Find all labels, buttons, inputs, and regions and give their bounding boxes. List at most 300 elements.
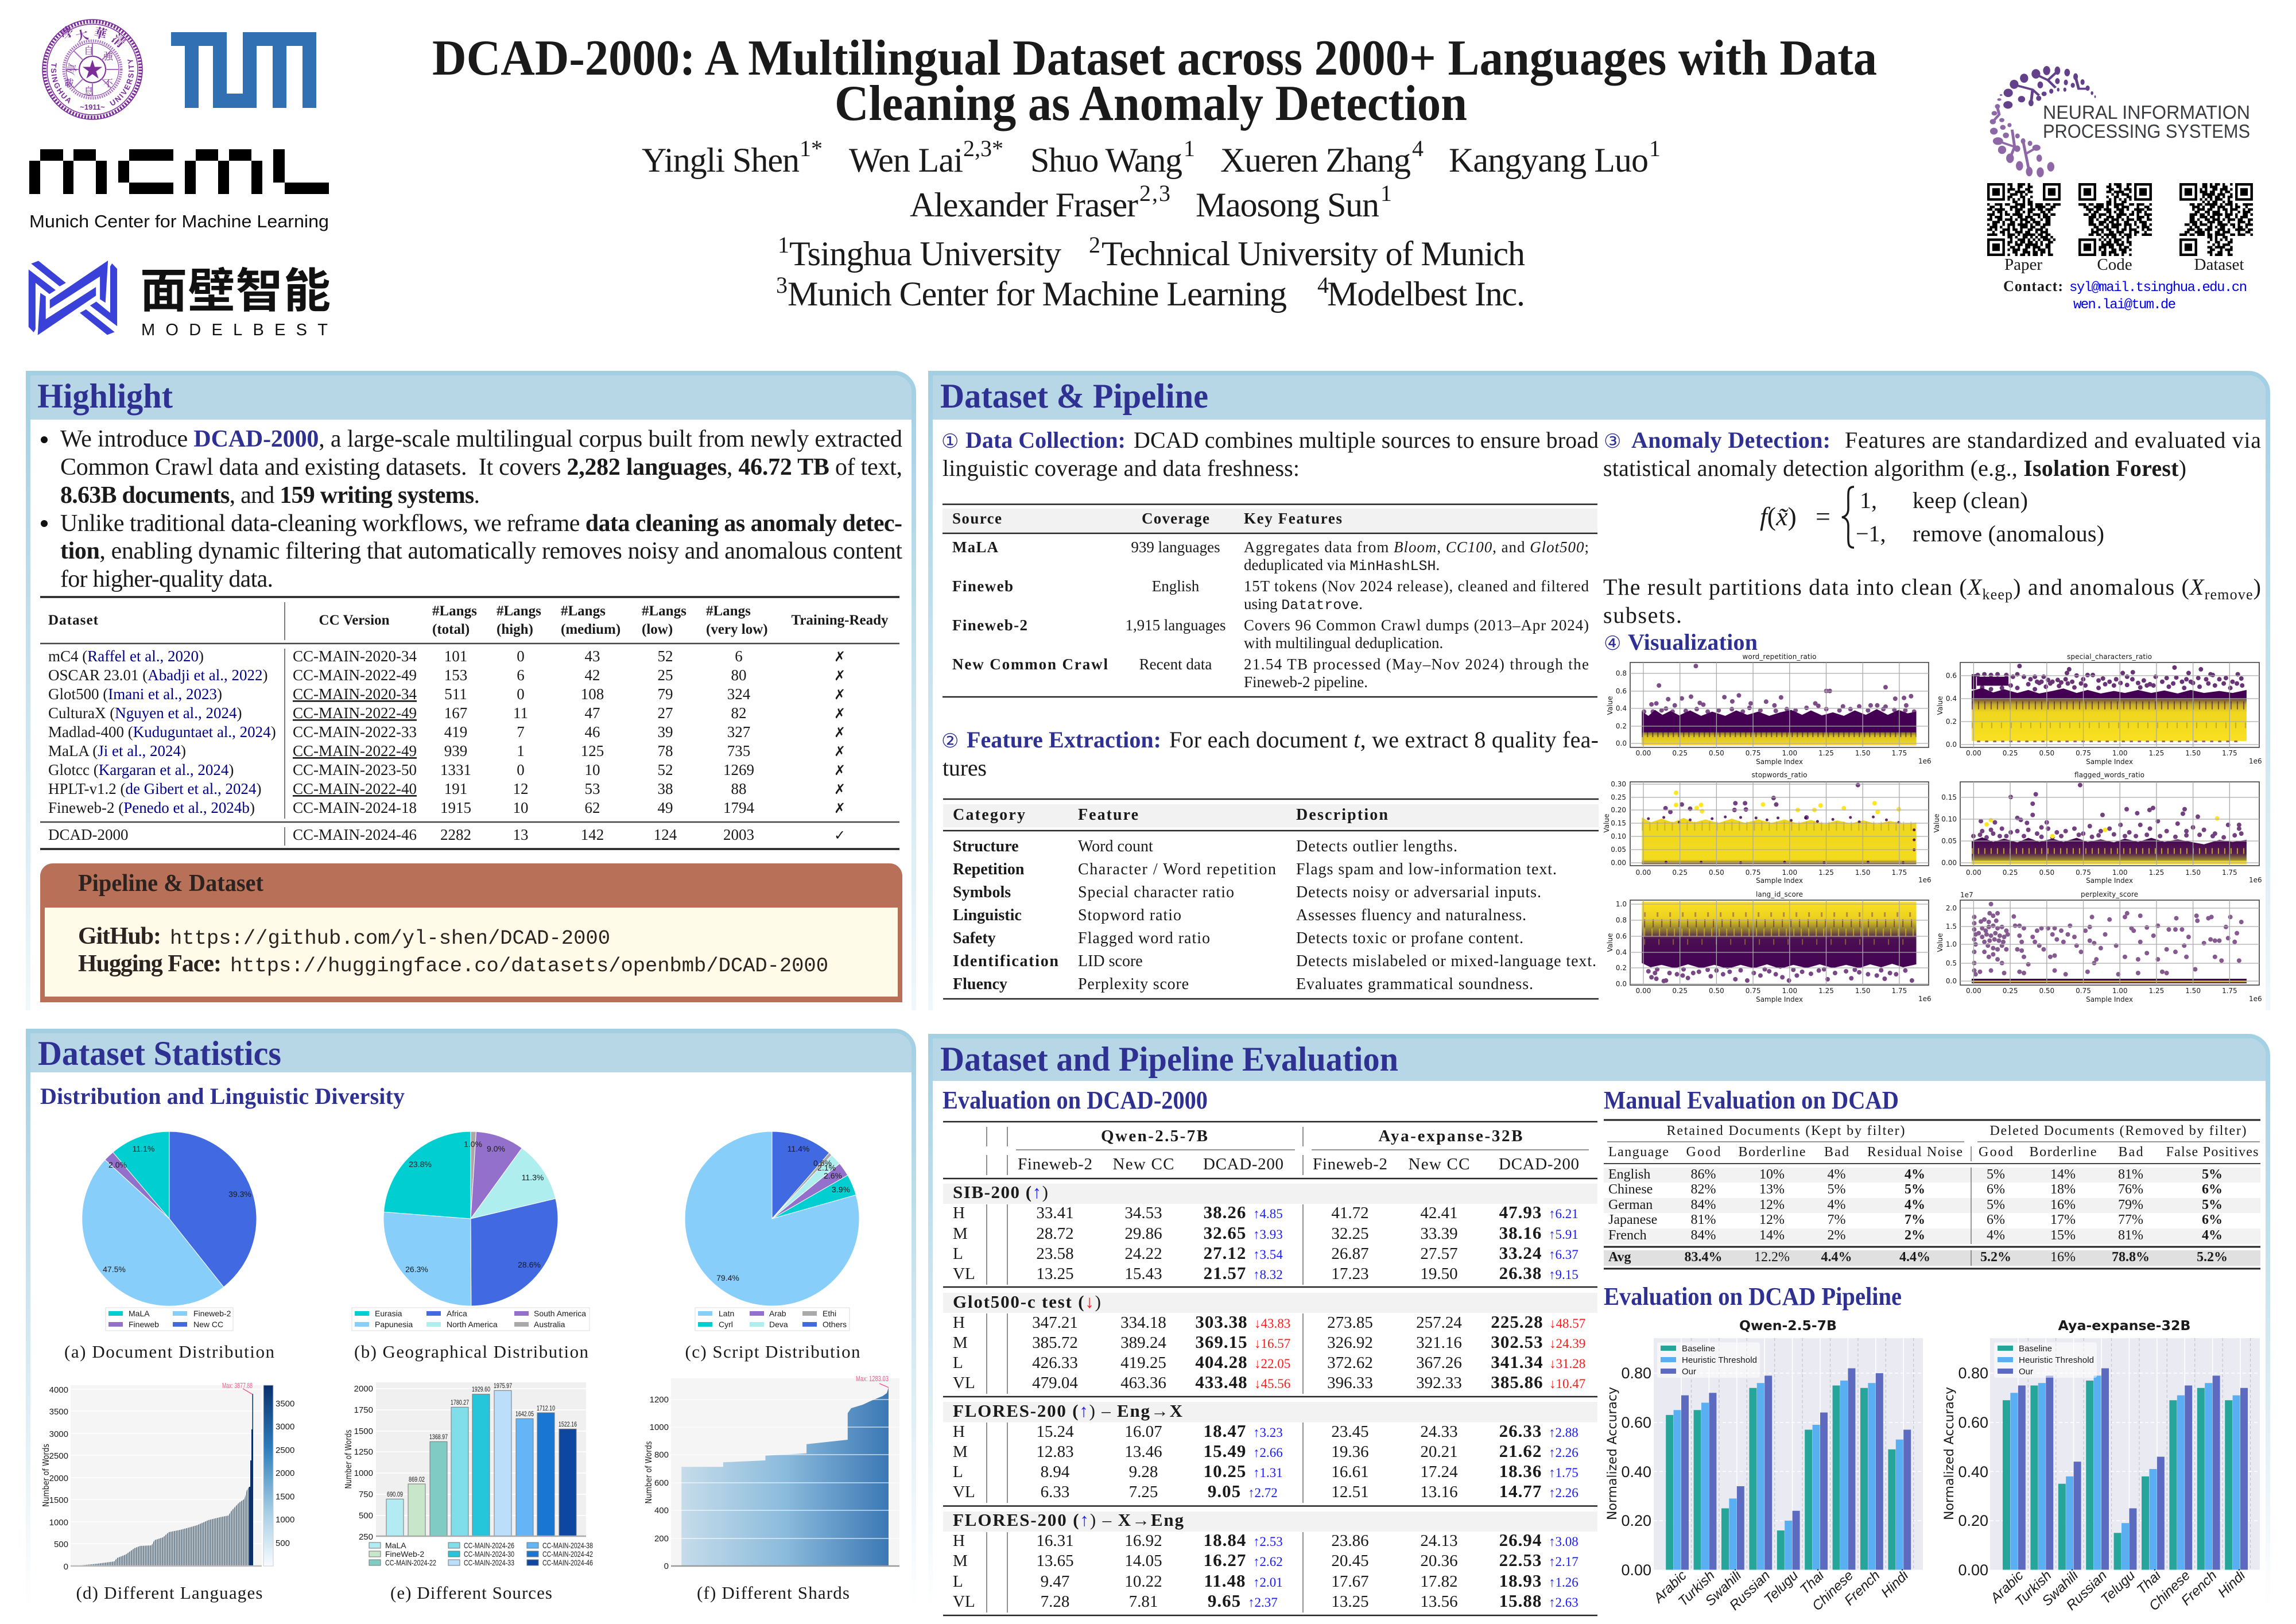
group: Glot500-c test: ↓10.47 bbox=[1549, 1377, 1585, 1391]
table rows: 167 bbox=[444, 704, 467, 722]
group: FLORES-200 Eng to X: 8.94 bbox=[1041, 1463, 1070, 1481]
group: FLORES-200 Eng to X: ↑2.88 bbox=[1549, 1425, 1578, 1440]
table: evaluation on DCAD-2000 bbox=[943, 1122, 1597, 1615]
group: FLORES-200 Eng to X: ↑2.66 bbox=[1253, 1445, 1283, 1460]
bar chart: different sources bbox=[343, 1382, 593, 1603]
group: FLORES-200 X to Eng: 20.36 bbox=[1420, 1552, 1458, 1570]
table rows: 84% bbox=[1691, 1228, 1716, 1243]
group: FLORES-200 Eng to X: 9.28 bbox=[1129, 1463, 1158, 1481]
table rows: MaLA (Ji et al., 2024) bbox=[48, 742, 186, 759]
text block: data collection: linguistic coverage and data freshness: bbox=[943, 455, 1300, 481]
chart: lang_id_score scatter: 0.4 bbox=[1616, 948, 1627, 956]
table column headers: Fineweb-2 bbox=[1313, 1155, 1387, 1173]
y axis ticks: 1750 bbox=[354, 1405, 373, 1415]
affiliations: 2 bbox=[1089, 232, 1100, 258]
table rows: OSCAR 23.01 (Abadji et al., 2022) bbox=[48, 666, 267, 684]
group: FLORES-200 X to Eng: 16.31 bbox=[1036, 1532, 1074, 1550]
table rows: CC-MAIN-2024-18 bbox=[293, 799, 417, 816]
group: Glot500-c test: 372.62 bbox=[1327, 1354, 1373, 1372]
chart: special_characters_ratio scatter bbox=[1936, 653, 2262, 766]
group: Glot500-c test: 326.92 bbox=[1327, 1334, 1373, 1352]
contact: Contact: bbox=[2003, 278, 2063, 294]
group: SIB-200: 27.57 bbox=[1420, 1245, 1458, 1263]
table column headers: Fineweb-2 bbox=[1018, 1155, 1092, 1173]
chart: perplexity_score scatter: 0.0 bbox=[1946, 977, 1957, 985]
bar chart: Aya-expanse-32B accuracy bbox=[1942, 1319, 2260, 1614]
chart: special_characters_ratio scatter: 1.75 bbox=[2222, 749, 2237, 757]
group: SIB-200: 13.25 bbox=[1036, 1265, 1074, 1283]
group: FLORES-200 Eng to X: 16.61 bbox=[1331, 1463, 1369, 1481]
legend: CC-MAIN-2024-26 bbox=[464, 1541, 514, 1550]
y axis ticks: 1250 bbox=[354, 1447, 373, 1457]
language labels: Telugu bbox=[1761, 1568, 1801, 1607]
group: SIB-200: ↑8.32 bbox=[1253, 1268, 1283, 1282]
table header: (very low) bbox=[706, 622, 768, 637]
highlights text block: tion, enabling dynamic filtering that automatically removes noisy and anomalous content bbox=[60, 538, 902, 564]
QR code: code bbox=[2078, 183, 2152, 256]
table rows: 14% bbox=[1759, 1228, 1785, 1243]
group: FLORES-200 X to Eng bbox=[953, 1510, 1578, 1611]
group: SIB-200: 21.57 bbox=[1204, 1263, 1246, 1283]
group: Glot500-c test: ↓45.56 bbox=[1254, 1377, 1290, 1391]
group: FLORES-200 X to Eng: 26.94 bbox=[1499, 1530, 1542, 1550]
visualization heading: ④ bbox=[1604, 632, 1621, 655]
table rows: 80 bbox=[731, 666, 746, 684]
chart: perplexity_score scatter: 2.0 bbox=[1946, 904, 1957, 912]
bar chart: Qwen-2.5-7B accuracy bbox=[1605, 1319, 1923, 1614]
legend: CC-MAIN-2024-22 bbox=[385, 1558, 436, 1567]
text block: feature extraction bbox=[941, 727, 1599, 781]
table: data sources: using Datatrove. bbox=[1244, 595, 1363, 614]
axis label: Normalized Accuracy bbox=[1605, 1387, 1620, 1520]
table rows: 939 bbox=[444, 742, 467, 759]
group: Glot500-c test: 396.33 bbox=[1327, 1374, 1373, 1392]
chart: lang_id_score scatter: 0.6 bbox=[1616, 932, 1627, 940]
table rows: Madlad-400 (Kuduguntaet al., 2024) bbox=[48, 723, 276, 741]
logo: Tsinghua University seal: 載 bbox=[64, 75, 74, 90]
group: SIB-200: ↑3.54 bbox=[1253, 1247, 1283, 1262]
table rows: 39 bbox=[658, 723, 673, 741]
y axis ticks bbox=[1958, 1365, 1988, 1579]
y axis ticks: 1500 bbox=[354, 1427, 373, 1436]
table rows: 10 bbox=[584, 761, 600, 778]
group: FLORES-200 Eng to X: L bbox=[953, 1463, 963, 1481]
chart: stopwords_ratio scatter: 1.75 bbox=[1892, 869, 1907, 877]
table rows: French bbox=[1608, 1228, 1647, 1243]
chart: special_characters_ratio scatter: 0.4 bbox=[1946, 695, 1957, 703]
text block: feature extraction: Feature Extraction: bbox=[967, 727, 1161, 753]
y axis ticks: 0 bbox=[64, 1562, 68, 1572]
table column headers: New CC bbox=[1409, 1155, 1469, 1173]
group: SIB-200: 42.41 bbox=[1420, 1204, 1458, 1222]
group: FLORES-200 X to Eng: 7.81 bbox=[1129, 1592, 1158, 1611]
chart: special_characters_ratio scatter: 0.75 bbox=[2076, 749, 2091, 757]
chart: word_repetition_ratio scatter: 0.00 bbox=[1636, 749, 1651, 757]
colour bar: 1500 bbox=[276, 1492, 294, 1502]
legend: Others bbox=[823, 1320, 847, 1329]
y axis ticks: 400 bbox=[654, 1506, 669, 1516]
chart: lang_id_score scatter: 0.0 bbox=[1616, 980, 1627, 988]
panel: Dataset and Pipeline Evaluation bbox=[930, 1036, 2268, 1624]
group: Glot500-c test: ↓31.28 bbox=[1549, 1356, 1585, 1371]
legend: Baseline bbox=[2019, 1344, 2052, 1354]
group: FLORES-200 Eng to X: 26.33 bbox=[1499, 1421, 1542, 1441]
table rows: English bbox=[1608, 1167, 1650, 1182]
table header: Deleted Documents (Removed by filter) bbox=[1989, 1123, 2247, 1138]
chart: perplexity_score scatter bbox=[1936, 890, 2262, 1003]
legend: Fineweb-2 bbox=[193, 1309, 231, 1318]
table rows: 5% bbox=[1987, 1167, 2005, 1182]
chart: stopwords_ratio scatter: 0.10 bbox=[1611, 832, 1626, 840]
panel frame bbox=[930, 1036, 2268, 1624]
group: FLORES-200 Eng to X: 15.49 bbox=[1204, 1441, 1246, 1461]
group: FLORES-200 X to Eng: 23.86 bbox=[1331, 1532, 1369, 1550]
y axis ticks: 1000 bbox=[650, 1423, 669, 1432]
bars bbox=[386, 1390, 576, 1536]
table header: (total) bbox=[432, 622, 470, 637]
table: data sources: 15T tokens (Nov 2024 release), cleaned and filtered bbox=[1244, 577, 1589, 595]
table rows: 83.4% bbox=[1684, 1250, 1722, 1265]
table rows: 511 bbox=[444, 685, 467, 703]
table header: (medium) bbox=[561, 622, 620, 637]
group: FLORES-200 X to Eng: VL bbox=[953, 1592, 975, 1611]
chart: perplexity_score scatter: 0.75 bbox=[2076, 987, 2091, 995]
chart: special_characters_ratio scatter: 0.25 bbox=[2003, 749, 2018, 757]
table rows: 25 bbox=[658, 666, 673, 684]
language labels: Swahili bbox=[2039, 1567, 2081, 1609]
group: FLORES-200 Eng to X: VL bbox=[953, 1483, 975, 1501]
chart: perplexity_score scatter: 1.00 bbox=[2112, 987, 2128, 995]
table: quality features: Perplexity score bbox=[1078, 975, 1189, 993]
max annotation bbox=[856, 1374, 889, 1387]
text block: result partitions: X bbox=[2189, 574, 2205, 600]
chart: special_characters_ratio scatter: 1e6 bbox=[2249, 757, 2262, 765]
bar chart: different shards bbox=[643, 1374, 899, 1603]
table rows: DCAD-2000 bbox=[48, 826, 129, 843]
y axis ticks bbox=[650, 1395, 669, 1571]
panel: Dataset Statistics bbox=[28, 1031, 914, 1624]
table: data sources: Aggregates data from Bloom, CC100, and Glot500; bbox=[1244, 538, 1589, 556]
table rows: 2% bbox=[1828, 1228, 1846, 1243]
table: data sources: MaLA bbox=[952, 538, 999, 556]
group: FLORES-200 Eng to X: ↑1.31 bbox=[1253, 1466, 1283, 1480]
y axis ticks: 1500 bbox=[49, 1495, 68, 1505]
panel: Highlight bbox=[28, 373, 914, 1010]
authors: Yingli Shen bbox=[642, 141, 800, 179]
pie chart: document distribution: 39.3% bbox=[228, 1189, 251, 1199]
bar value labels: 1642.05 bbox=[515, 1410, 534, 1418]
chart: perplexity_score scatter: 1.5 bbox=[1946, 923, 1957, 931]
group: FLORES-200 X to Eng: 15.88 bbox=[1499, 1591, 1542, 1611]
group: Glot500-c test: ↓16.57 bbox=[1254, 1336, 1290, 1351]
legend: FineWeb-2 bbox=[385, 1549, 424, 1559]
group: FLORES-200 Eng to X: 15.24 bbox=[1036, 1423, 1074, 1441]
chart: stopwords_ratio scatter: Value bbox=[1603, 814, 1611, 832]
callout: Pipeline & Dataset links: GitHub: bbox=[78, 923, 161, 949]
y axis ticks: 2500 bbox=[49, 1451, 68, 1461]
table: data sources: 939 languages bbox=[1131, 538, 1220, 556]
visualization heading: Visualization bbox=[1628, 629, 1758, 655]
table rows: CC-MAIN-2022-33 bbox=[293, 723, 417, 741]
group: Glot500-c test bbox=[953, 1292, 1585, 1392]
chart: flagged_words_ratio scatter: 0.00 bbox=[1966, 869, 1981, 877]
group: SIB-200: 19.50 bbox=[1420, 1265, 1458, 1283]
table rows: 12% bbox=[1759, 1212, 1785, 1227]
group: FLORES-200 X to Eng: 10.22 bbox=[1124, 1572, 1162, 1591]
table header: Residual Noise bbox=[1867, 1145, 1963, 1160]
table rows: mC4 (Raffel et al., 2020) bbox=[48, 648, 204, 665]
table rows: 79 bbox=[658, 685, 673, 703]
chart: special_characters_ratio scatter: 1.25 bbox=[2149, 749, 2164, 757]
chart: special_characters_ratio scatter: 0.0 bbox=[1946, 741, 1957, 749]
table rows: 13% bbox=[1759, 1182, 1785, 1197]
panel header band bbox=[933, 375, 2266, 420]
chart: perplexity_score scatter: 0.50 bbox=[2039, 987, 2054, 995]
chart: lang_id_score scatter: 1.75 bbox=[1892, 987, 1907, 995]
table rows: 1915 bbox=[440, 799, 471, 816]
callout: Pipeline & Dataset links: Pipeline & Dataset bbox=[78, 870, 263, 897]
bar value labels: 1780.27 bbox=[451, 1398, 469, 1406]
group: SIB-200: 26.87 bbox=[1331, 1245, 1369, 1263]
group: FLORES-200 X to Eng: 18.84 bbox=[1204, 1530, 1246, 1550]
chart: stopwords_ratio scatter: 0.25 bbox=[1611, 793, 1626, 801]
group: FLORES-200 Eng to X: H bbox=[953, 1423, 965, 1441]
group: Glot500-c test: 347.21 bbox=[1032, 1313, 1078, 1332]
table rows: ✗ bbox=[834, 724, 846, 741]
table: quality features: Fluency bbox=[953, 975, 1007, 993]
y axis ticks bbox=[354, 1384, 373, 1542]
group: SIB-200: 26.38 bbox=[1499, 1263, 1542, 1283]
table: quality features: Detects mislabeled or mixed-language text. bbox=[1296, 952, 1596, 970]
chart: word_repetition_ratio scatter: Value bbox=[1606, 696, 1614, 715]
table rows: 6% bbox=[2202, 1182, 2223, 1197]
table rows: ✗ bbox=[834, 800, 846, 816]
text block: anomaly detection: Anomaly Detection: bbox=[1631, 427, 1830, 453]
table column headers bbox=[1018, 1127, 1579, 1173]
language labels: Russian bbox=[1727, 1568, 1773, 1614]
chart: word_repetition_ratio scatter: word_repetition_ratio bbox=[1743, 653, 1816, 661]
chart: special_characters_ratio scatter: special_characters_ratio bbox=[2067, 653, 2152, 661]
table rows: 6 bbox=[517, 666, 525, 684]
authors bbox=[642, 135, 1661, 224]
group: FLORES-200 Eng to X: ↑1.75 bbox=[1549, 1466, 1578, 1480]
table: data sources: with multilingual deduplication. bbox=[1244, 634, 1443, 652]
group: Glot500-c test: L bbox=[953, 1354, 963, 1372]
icon: ModelBest ribbon mark bbox=[29, 261, 117, 335]
language labels: Russian bbox=[2064, 1568, 2110, 1614]
table rows: CC-MAIN-2020-34 bbox=[293, 648, 417, 665]
text block: result partitions: ) bbox=[2254, 574, 2261, 600]
table header bbox=[1608, 1123, 2258, 1160]
table header: #Langs bbox=[497, 603, 541, 619]
QR codes with captions bbox=[1987, 183, 2253, 274]
heading: Highlight bbox=[37, 377, 173, 415]
logo: Tsinghua University seal: 不 bbox=[103, 75, 113, 90]
y axis ticks: 750 bbox=[359, 1490, 373, 1499]
callout: Pipeline & Dataset links: https://huggingface.co/datasets/openbmb/DCAD-2000 bbox=[230, 954, 828, 978]
group: FLORES-200 Eng to X: M bbox=[953, 1443, 968, 1461]
legend: Our bbox=[2019, 1367, 2033, 1377]
NeurIPS wordmark: PROCESSING SYSTEMS bbox=[2043, 121, 2250, 142]
table rows: German bbox=[1608, 1197, 1653, 1212]
group: Glot500-c test: 404.28 bbox=[1195, 1352, 1248, 1372]
group: SIB-200: 47.93 bbox=[1499, 1202, 1542, 1222]
table: data sources: Fineweb-2 pipeline. bbox=[1244, 673, 1368, 691]
affiliations: 4 bbox=[1317, 272, 1329, 298]
group: SIB-200: 29.86 bbox=[1124, 1224, 1162, 1243]
chart: stopwords_ratio scatter: 0.30 bbox=[1611, 780, 1626, 788]
table: quality features: LID score bbox=[1078, 952, 1143, 970]
table rows: 16% bbox=[2050, 1250, 2076, 1265]
chart: flagged_words_ratio scatter: 0.15 bbox=[1941, 793, 1957, 801]
table header: Training-Ready bbox=[791, 613, 889, 628]
table rows: 2003 bbox=[723, 826, 754, 843]
y axis ticks: 250 bbox=[359, 1532, 373, 1542]
legend: Cyrl bbox=[719, 1320, 733, 1329]
table rows: 1269 bbox=[723, 761, 754, 778]
chart: stopwords_ratio scatter: 0.00 bbox=[1636, 869, 1651, 877]
table: quality features: Repetition bbox=[953, 861, 1025, 878]
table: data sources: Fineweb-2 bbox=[952, 617, 1027, 634]
legend: South America bbox=[534, 1309, 586, 1318]
table: quality features: Symbols bbox=[953, 883, 1011, 901]
chart: perplexity_score scatter: 1e7 bbox=[1960, 891, 1973, 899]
group: FLORES-200 X to Eng: 17.67 bbox=[1331, 1572, 1369, 1591]
chart: stopwords_ratio scatter: Sample Index bbox=[1756, 877, 1803, 885]
chart: perplexity_score scatter: 0.00 bbox=[1966, 987, 1981, 995]
max annotation bbox=[222, 1381, 253, 1394]
group: FLORES-200 X to Eng: M bbox=[953, 1552, 968, 1570]
group: FLORES-200 X to Eng: 14.05 bbox=[1124, 1552, 1162, 1570]
group: FLORES-200 X to Eng: ↑1.26 bbox=[1549, 1575, 1578, 1590]
language labels: Arabic bbox=[1987, 1568, 2026, 1607]
chart: lang_id_score scatter: 0.50 bbox=[1709, 987, 1724, 995]
group: Glot500-c test: 367.26 bbox=[1416, 1354, 1462, 1372]
y axis ticks: 0.40 bbox=[1958, 1463, 1988, 1480]
formula: isolation forest decision: f(x̃) bbox=[1760, 502, 1797, 531]
text block: anomaly detection: ③ bbox=[1604, 430, 1621, 453]
NeurIPS wordmark: NEURAL INFORMATION bbox=[2043, 102, 2250, 123]
logo: Tsinghua University seal: 自 bbox=[84, 42, 94, 57]
table rows: 5% bbox=[2202, 1197, 2223, 1212]
group: SIB-200: 28.72 bbox=[1036, 1224, 1074, 1243]
QR code: dataset bbox=[2179, 183, 2253, 256]
group: Glot500-c test: 321.16 bbox=[1416, 1334, 1462, 1352]
group: SIB-200 bbox=[953, 1182, 1578, 1283]
group: FLORES-200 X to Eng: 24.13 bbox=[1420, 1532, 1458, 1550]
logo: Tsinghua University seal: 息 bbox=[84, 83, 94, 98]
chart: stopwords_ratio scatter: stopwords_ratio bbox=[1752, 771, 1807, 779]
max annotation: Max: 1283.03 bbox=[856, 1374, 889, 1383]
y axis ticks bbox=[49, 1385, 68, 1572]
bar value labels: 1368.97 bbox=[429, 1433, 448, 1441]
table: quality features: Detects outlier lengths. bbox=[1296, 838, 1457, 855]
y axis ticks: 0.80 bbox=[1621, 1365, 1651, 1382]
table: quality features: Category bbox=[953, 806, 1025, 824]
table rows: ✗ bbox=[834, 649, 846, 665]
table header: #Langs bbox=[642, 603, 687, 619]
table rows: 4% bbox=[2202, 1228, 2223, 1243]
group: Glot500-c test: 463.36 bbox=[1120, 1374, 1166, 1392]
group: Glot500-c test: 273.85 bbox=[1327, 1313, 1373, 1332]
chart: flagged_words_ratio scatter: Value bbox=[1933, 814, 1941, 832]
group: FLORES-200 X to Eng: 13.25 bbox=[1331, 1592, 1369, 1611]
table rows: 0 bbox=[517, 761, 525, 778]
pie chart: geographical distribution: 28.6% bbox=[518, 1260, 541, 1269]
group: FLORES-200 X to Eng: ↑2.17 bbox=[1549, 1555, 1578, 1569]
group: Glot500-c test: Glot500-c test (↓) bbox=[953, 1292, 1101, 1312]
group: FLORES-200 X to Eng: ↑2.53 bbox=[1253, 1534, 1283, 1549]
y axis ticks: 0.80 bbox=[1958, 1365, 1988, 1382]
table rows: CC-MAIN-2022-49 bbox=[293, 742, 417, 759]
table: data sources: deduplicated via MinHashLSH. bbox=[1244, 556, 1440, 575]
table: quality features: Feature bbox=[1078, 806, 1138, 824]
language labels: Chinese bbox=[2146, 1568, 2193, 1614]
caption: (f) Different Shards bbox=[697, 1583, 850, 1603]
table rows: Fineweb-2 (Penedo et al., 2024b) bbox=[48, 799, 255, 816]
chart: stopwords_ratio scatter: 1e6 bbox=[1918, 876, 1932, 884]
table rows: CC-MAIN-2024-46 bbox=[293, 826, 417, 843]
contact bbox=[2003, 278, 2247, 313]
y axis ticks: 0.20 bbox=[1621, 1512, 1651, 1529]
language labels: Chinese bbox=[1809, 1568, 1856, 1614]
panel frame bbox=[28, 1031, 914, 1624]
group: FLORES-200 Eng to X: 19.36 bbox=[1331, 1443, 1369, 1461]
subheading: Distribution and Linguistic Diversity bbox=[40, 1083, 405, 1109]
table rows: CC-MAIN-2020-34 bbox=[293, 685, 417, 703]
chart: lang_id_score scatter: 0.75 bbox=[1746, 987, 1760, 995]
chart: word_repetition_ratio scatter: 1e6 bbox=[1918, 757, 1932, 765]
chart: flagged_words_ratio scatter: 0.25 bbox=[2003, 869, 2018, 877]
legend: Fineweb bbox=[129, 1320, 159, 1329]
table: quality features: Special character ratio bbox=[1078, 883, 1234, 901]
logo: Tsinghua University seal bbox=[42, 19, 143, 120]
group: FLORES-200 X to Eng: 22.53 bbox=[1499, 1550, 1542, 1570]
table rows: ✗ bbox=[834, 687, 846, 703]
chart: perplexity_score scatter: 0.5 bbox=[1946, 959, 1957, 967]
callout: Pipeline & Dataset links bbox=[40, 863, 902, 1002]
group: Glot500-c test: 392.33 bbox=[1416, 1374, 1462, 1392]
table rows: 13 bbox=[513, 826, 528, 843]
language labels: Turkish bbox=[2012, 1568, 2055, 1610]
table column headers: DCAD-200 bbox=[1203, 1155, 1283, 1173]
table header: Borderline bbox=[2030, 1145, 2096, 1160]
authors: 1 bbox=[1184, 135, 1195, 161]
table rows: 81% bbox=[2118, 1167, 2143, 1182]
legend: MaLA bbox=[385, 1541, 406, 1550]
chart: flagged_words_ratio scatter: 1.50 bbox=[2185, 869, 2201, 877]
contact: wen.lai@tum.de bbox=[2073, 297, 2176, 313]
table rows bbox=[48, 648, 846, 843]
table rows: ✗ bbox=[834, 706, 846, 722]
group: Glot500-c test: 385.72 bbox=[1032, 1334, 1078, 1352]
group: FLORES-200 X to Eng: 17.82 bbox=[1420, 1572, 1458, 1591]
group: SIB-200: ↑5.91 bbox=[1549, 1227, 1578, 1242]
chart: special_characters_ratio scatter: 1.00 bbox=[2112, 749, 2128, 757]
heading: Dataset Statistics bbox=[38, 1034, 281, 1072]
table rows: 7% bbox=[1828, 1212, 1846, 1227]
group: FLORES-200 Eng to X: ↑2.26 bbox=[1549, 1486, 1578, 1500]
legend: Baseline bbox=[1682, 1344, 1715, 1354]
text block: data collection: DCAD combines multiple sources to ensure broad bbox=[1134, 427, 1599, 453]
group: FLORES-200 Eng to X: FLORES-200 (↑) – Eng→X bbox=[953, 1401, 1183, 1421]
language labels: Hindi bbox=[2215, 1567, 2248, 1600]
table rows: 6% bbox=[1987, 1212, 2005, 1227]
table: data sources: Coverage bbox=[1142, 510, 1209, 527]
table rows: 2% bbox=[1905, 1228, 1925, 1243]
table rows: CC-MAIN-2022-49 bbox=[293, 704, 417, 722]
group: FLORES-200 X to Eng: ↑2.62 bbox=[1253, 1555, 1283, 1569]
